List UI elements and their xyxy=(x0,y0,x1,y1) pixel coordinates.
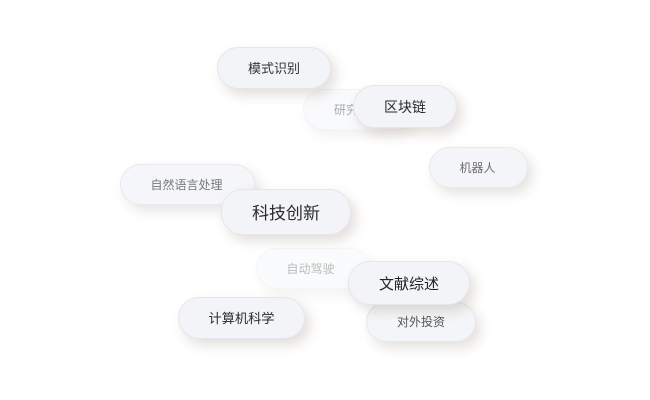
tag: 对外投资 xyxy=(366,302,476,342)
tag: 自然语言处理 xyxy=(120,164,255,205)
tag: 对外投资: 对外投资 xyxy=(397,315,445,329)
tag: 计算机科学: 计算机科学 xyxy=(209,311,274,326)
tag: 研究 (faded, behind): 研究热点 xyxy=(334,102,382,116)
tag: 机器人 xyxy=(429,147,528,188)
tag: 计算机科学 xyxy=(178,297,305,339)
tag: 研究 (faded, behind) xyxy=(303,89,413,130)
tag: 区块链: 区块链 xyxy=(384,98,426,114)
tag: 机器人: 机器人 xyxy=(459,160,496,174)
tag: 自动驾驶 (faded): 自动驾驶 xyxy=(286,262,334,276)
tag: 模式识别: 模式识别 xyxy=(248,61,300,76)
tag: 文献综述: 文献综述 xyxy=(379,276,439,292)
tag: 科技创新: 科技创新 xyxy=(252,204,320,223)
tag: 科技创新 xyxy=(221,189,351,235)
tag: 文献综述 xyxy=(348,261,470,305)
tag: 模式识别 xyxy=(217,47,331,89)
tag: 自然语言处理: 自然语言处理 xyxy=(150,178,222,192)
tag: 自动驾驶 (faded) xyxy=(256,248,370,289)
tag: 区块链 xyxy=(353,85,457,128)
